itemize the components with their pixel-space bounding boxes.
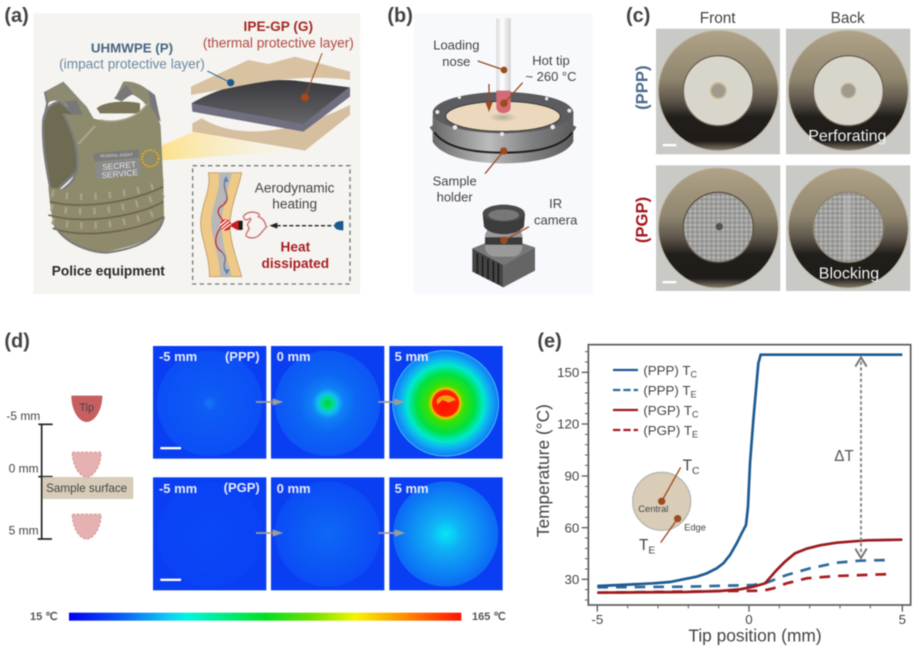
- photo: PPP front: [656, 29, 780, 154]
- panel a background: [33, 13, 360, 294]
- thermal map: PGP 0 mm: 0 mm: [277, 481, 311, 496]
- impact point: [220, 219, 231, 231]
- heat dissipated label: Heat: [281, 240, 311, 255]
- armor cross-section: [201, 173, 242, 277]
- icon: IR camera: [472, 205, 535, 287]
- inset: sample measuring points: [633, 458, 706, 556]
- panel a: police equipment: [4, 5, 360, 294]
- downward arrow: [485, 84, 493, 112]
- heat wave lines: [216, 178, 227, 273]
- panel d label: (d): [4, 330, 30, 352]
- labels: Sample: [433, 173, 477, 188]
- y-axis tick labels: 90: [565, 469, 579, 484]
- exploded layers: [191, 57, 350, 151]
- icon: yellow beam: [159, 132, 297, 161]
- tip icon: Tip: [79, 402, 94, 414]
- pointer: UHMWPE: [207, 71, 234, 86]
- arrows between frames: [256, 398, 405, 537]
- thermal map: PPP 0 mm: [271, 346, 384, 459]
- photo: PPP back: Perforating: [808, 128, 886, 145]
- thermal map: PPP -5 mm: -5 mm: [159, 349, 197, 364]
- sample holder: [433, 92, 573, 163]
- inset: sample measuring points: T: [683, 458, 692, 475]
- thermal map: PGP -5 mm: (PGP): [224, 480, 260, 495]
- labels: Hot tip: [532, 53, 570, 68]
- UHMWPE label: [59, 40, 205, 72]
- legend: C: [690, 370, 697, 380]
- column headings: Front: [700, 10, 736, 27]
- labels: ~ 260 °C: [525, 69, 577, 84]
- heat dissipated label: [262, 240, 329, 271]
- photo: PGP back: Blocking: [819, 265, 879, 282]
- curve: PPP TC: [597, 355, 902, 586]
- y-axis tick labels: 60: [565, 520, 579, 535]
- pointers: [478, 61, 523, 174]
- aerodynamic heating label: Aerodynamic: [255, 180, 335, 195]
- photo: PGP front: [656, 165, 780, 291]
- vest name patch: FEDERAL AGENT: [100, 152, 134, 159]
- row label PPP: (PPP): [633, 65, 652, 110]
- thermal map: PGP -5 mm: -5 mm: [159, 481, 197, 496]
- legend: C: [692, 410, 699, 420]
- thermal map: PGP -5 mm: [153, 477, 266, 590]
- thermal map: PPP 0 mm: 0 mm: [277, 349, 311, 364]
- colour bar: [30, 611, 506, 623]
- loading nose: [496, 18, 511, 113]
- tip position scale: 0 mm: [9, 461, 39, 475]
- y-axis title: Temperature (°C): [533, 404, 553, 537]
- tip position scale: 5 mm: [9, 523, 39, 537]
- x-axis tick labels: 5: [899, 612, 906, 627]
- labels: holder: [437, 190, 473, 205]
- sample surface bar: [43, 477, 133, 499]
- vest name patch: SERVICE: [101, 167, 139, 180]
- pointer: camera: [500, 227, 529, 244]
- aerodynamic heating label: heating: [272, 197, 317, 212]
- panel b label: (b): [387, 5, 413, 27]
- thermal map: PGP 0 mm: [271, 477, 384, 590]
- labels: nose: [442, 54, 470, 69]
- thermal map: PGP 5 mm: [389, 477, 503, 590]
- column headings: Back: [831, 10, 865, 27]
- panel b background: [414, 13, 593, 294]
- pointer: IPE-GP: [301, 53, 322, 101]
- x-axis title: Tip position (mm): [688, 626, 822, 646]
- row label PGP: (PGP): [633, 197, 652, 243]
- dashed trajectory: [277, 224, 334, 228]
- labels: [433, 38, 578, 227]
- IPE-GP label: (thermal protective layer): [203, 36, 354, 51]
- y-axis tick labels: 150: [557, 365, 579, 380]
- inset: sample measuring points: Edge: [684, 523, 706, 533]
- IPE-GP label: [203, 19, 354, 51]
- y-axis tick labels: 30: [565, 572, 579, 587]
- photo: PPP back: [786, 29, 910, 154]
- icon: bullet: [334, 221, 343, 230]
- heat dissipated label: dissipated: [262, 256, 329, 271]
- inset: sample measuring points: T: [639, 537, 648, 554]
- legend: (PPP) T: [643, 363, 690, 378]
- x-axis tick labels: 0: [745, 612, 753, 627]
- thermal map: PPP 5 mm: 5 mm: [395, 349, 429, 364]
- curve: PGP TC: [597, 540, 902, 593]
- tip position scale: -5 mm: [6, 409, 40, 423]
- inset: sample measuring points: C: [692, 466, 700, 477]
- thermal map: PPP 5 mm: [389, 346, 503, 459]
- thermal map: PPP -5 mm: (PPP): [225, 349, 260, 364]
- y-axis tick labels: 120: [557, 417, 579, 432]
- sample surface bar: Sample surface: [46, 482, 127, 495]
- icon: bullet-proof vest: [43, 81, 164, 253]
- colour bar: 165 ℃: [472, 611, 506, 623]
- panel d: IR thermal maps: [4, 330, 506, 623]
- colour bar: 15 ℃: [30, 611, 58, 623]
- thermal map: PPP -5 mm: [153, 346, 266, 459]
- labels: camera: [534, 212, 578, 227]
- aerodynamic heating label: [255, 180, 335, 212]
- legend: (PGP) T: [643, 403, 692, 418]
- vest name patch: [93, 149, 141, 180]
- panel e: temperature chart: [533, 330, 911, 646]
- x-axis tick labels: [591, 612, 906, 627]
- panel a label: (a): [4, 5, 29, 27]
- panel c: sample photographs: [626, 5, 910, 291]
- vest name patch: SECRET: [102, 159, 136, 172]
- vest caption: Police equipment: [52, 263, 165, 278]
- labels: IR: [549, 196, 562, 211]
- tip position scale: [6, 409, 53, 539]
- legend: (PGP) T: [643, 423, 692, 438]
- legend: [613, 363, 699, 440]
- panel b: test set-up: [387, 5, 593, 294]
- UHMWPE label: (impact protective layer): [59, 57, 205, 72]
- ghost tip at 5 mm: [72, 514, 101, 539]
- ghost tip at 0 mm: [72, 452, 101, 477]
- panel e label: (e): [537, 330, 562, 352]
- tip icon: [71, 396, 102, 422]
- axes frame: [582, 345, 911, 612]
- delta T arrow: ΔT: [834, 448, 854, 465]
- x-axis tick labels: -5: [591, 612, 603, 627]
- IPE-GP label: IPE-GP (G): [244, 19, 313, 34]
- labels: Loading: [433, 38, 479, 53]
- delta T arrow: [834, 357, 867, 558]
- photo: PGP back: [786, 165, 910, 291]
- y-axis tick labels: [557, 365, 579, 587]
- column headings: [700, 10, 865, 27]
- dotted highlight circle: [142, 150, 159, 167]
- heat burst: [243, 212, 267, 238]
- legend: (PPP) T: [643, 383, 690, 398]
- thermal map: PGP 5 mm: 5 mm: [395, 481, 429, 496]
- legend: E: [690, 390, 696, 400]
- UHMWPE label: UHMWPE (P): [91, 40, 173, 55]
- curve: PPP TE: [597, 560, 890, 587]
- curve: PGP TE: [597, 574, 893, 593]
- inset: sample measuring points: E: [648, 545, 655, 556]
- legend: E: [692, 430, 698, 440]
- panel c label: (c): [626, 5, 650, 27]
- inset: sample measuring points: Central: [638, 504, 668, 514]
- inset: heat dissipation: [193, 166, 350, 284]
